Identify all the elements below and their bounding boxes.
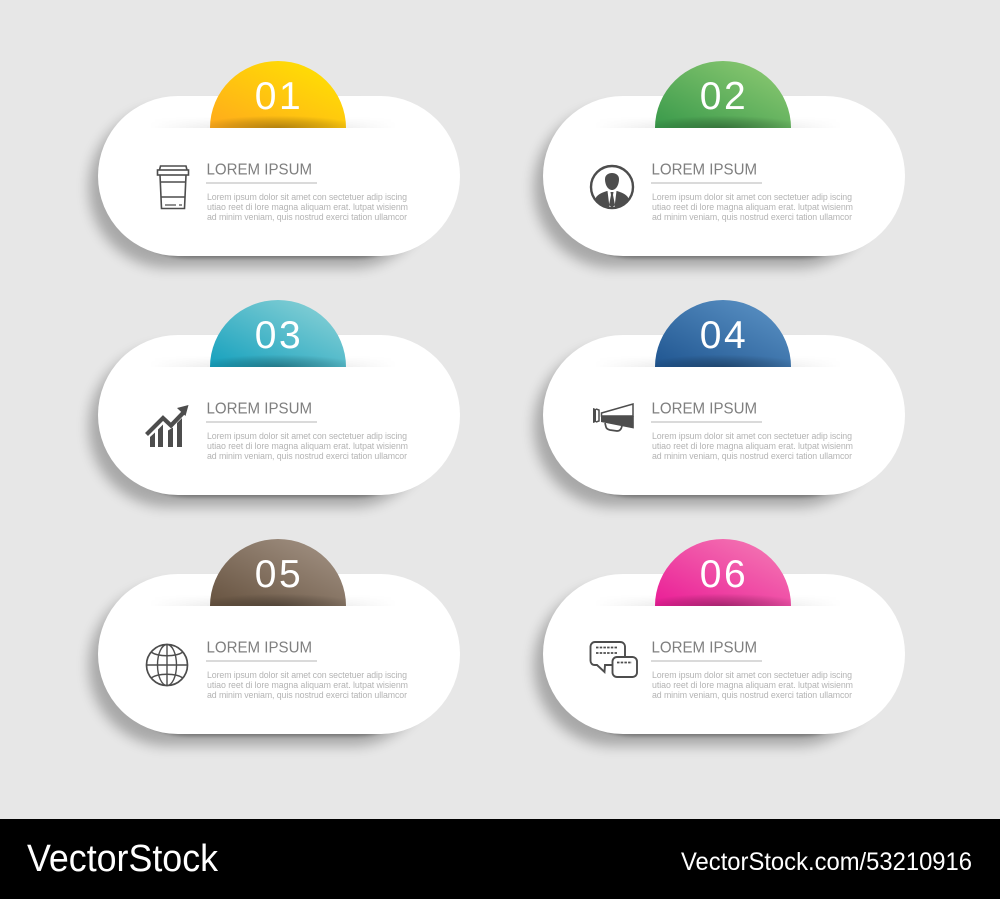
body text: Lorem ipsum dolor sit amet con sectetuer adip iscing <box>652 192 852 202</box>
number 02: 02 <box>700 75 748 118</box>
number 01: 01 <box>255 75 303 118</box>
semicircle tab 02 <box>655 61 791 128</box>
icon: globe <box>146 644 188 686</box>
body text <box>652 670 853 700</box>
body text <box>207 192 408 222</box>
card shadow <box>534 339 880 507</box>
footer logo: VectorStock <box>27 838 219 880</box>
icon: megaphone <box>593 404 634 431</box>
icon: coffee cup <box>158 166 188 208</box>
panel: step 02 <box>534 61 905 268</box>
footer url: VectorStock.com/53210916 <box>681 848 972 876</box>
semicircle tab 05 <box>210 539 346 606</box>
icon: businessman <box>591 166 633 209</box>
body text: ad minim veniam, quis nostrud exerci tation ullamcor <box>652 690 852 700</box>
card shadow <box>534 100 880 268</box>
body text: Lorem ipsum dolor sit amet con sectetuer adip iscing <box>652 670 852 680</box>
card shadow <box>89 100 435 268</box>
number 05: 05 <box>255 553 303 596</box>
body text <box>652 192 853 222</box>
panel: step 04 <box>534 300 905 507</box>
heading: LOREM IPSUM <box>206 400 312 418</box>
semicircle tab 01 <box>210 61 346 128</box>
number 04: 04 <box>700 314 748 357</box>
icon: chat bubbles <box>590 642 637 677</box>
body text: ad minim veniam, quis nostrud exerci tation ullamcor <box>652 212 852 222</box>
panel: step 05 <box>89 539 460 746</box>
heading: LOREM IPSUM <box>206 640 312 656</box>
body text: ad minim veniam, quis nostrud exerci tation ullamcor <box>207 690 407 700</box>
heading: LOREM IPSUM <box>652 162 757 178</box>
body text: Lorem ipsum dolor sit amet con sectetuer adip iscing <box>207 192 407 202</box>
number 06: 06 <box>700 553 748 596</box>
heading: LOREM IPSUM <box>206 162 312 178</box>
body text: utiao reet di lore magna aliquam erat. lutpat wisienm <box>652 680 853 690</box>
white card <box>543 335 905 495</box>
footer bar <box>0 819 1000 899</box>
body text: Lorem ipsum dolor sit amet con sectetuer adip iscing <box>207 431 407 441</box>
body text: Lorem ipsum dolor sit amet con sectetuer adip iscing <box>652 431 852 441</box>
white card <box>98 574 460 734</box>
white card <box>543 574 905 734</box>
body text: utiao reet di lore magna aliquam erat. lutpat wisienm <box>652 441 853 451</box>
body text: utiao reet di lore magna aliquam erat. lutpat wisienm <box>652 202 853 212</box>
body text: Lorem ipsum dolor sit amet con sectetuer adip iscing <box>207 670 407 680</box>
semicircle tab 03 <box>210 300 346 367</box>
white card <box>98 335 460 495</box>
white card <box>543 96 905 256</box>
body text: utiao reet di lore magna aliquam erat. lutpat wisienm <box>207 441 408 451</box>
panel: step 06 <box>534 539 905 746</box>
heading: LOREM IPSUM <box>652 640 757 656</box>
semicircle tab 06 <box>655 539 791 606</box>
card shadow <box>89 339 435 507</box>
body text: utiao reet di lore magna aliquam erat. lutpat wisienm <box>207 680 408 690</box>
body text <box>652 431 853 461</box>
body text <box>207 670 408 700</box>
semicircle tab 04 <box>655 300 791 367</box>
body text: ad minim veniam, quis nostrud exerci tation ullamcor <box>207 212 407 222</box>
white card <box>98 96 460 256</box>
panel: step 03 <box>89 300 460 507</box>
icon: growth chart <box>146 405 188 447</box>
body text: ad minim veniam, quis nostrud exerci tation ullamcor <box>652 451 852 461</box>
body text: ad minim veniam, quis nostrud exerci tation ullamcor <box>207 451 407 461</box>
body text <box>207 431 408 461</box>
body text: utiao reet di lore magna aliquam erat. lutpat wisienm <box>207 202 408 212</box>
heading: LOREM IPSUM <box>652 400 757 418</box>
number 03: 03 <box>255 314 303 357</box>
card shadow <box>89 578 435 746</box>
card shadow <box>534 578 880 746</box>
panel: step 01 <box>89 61 460 268</box>
